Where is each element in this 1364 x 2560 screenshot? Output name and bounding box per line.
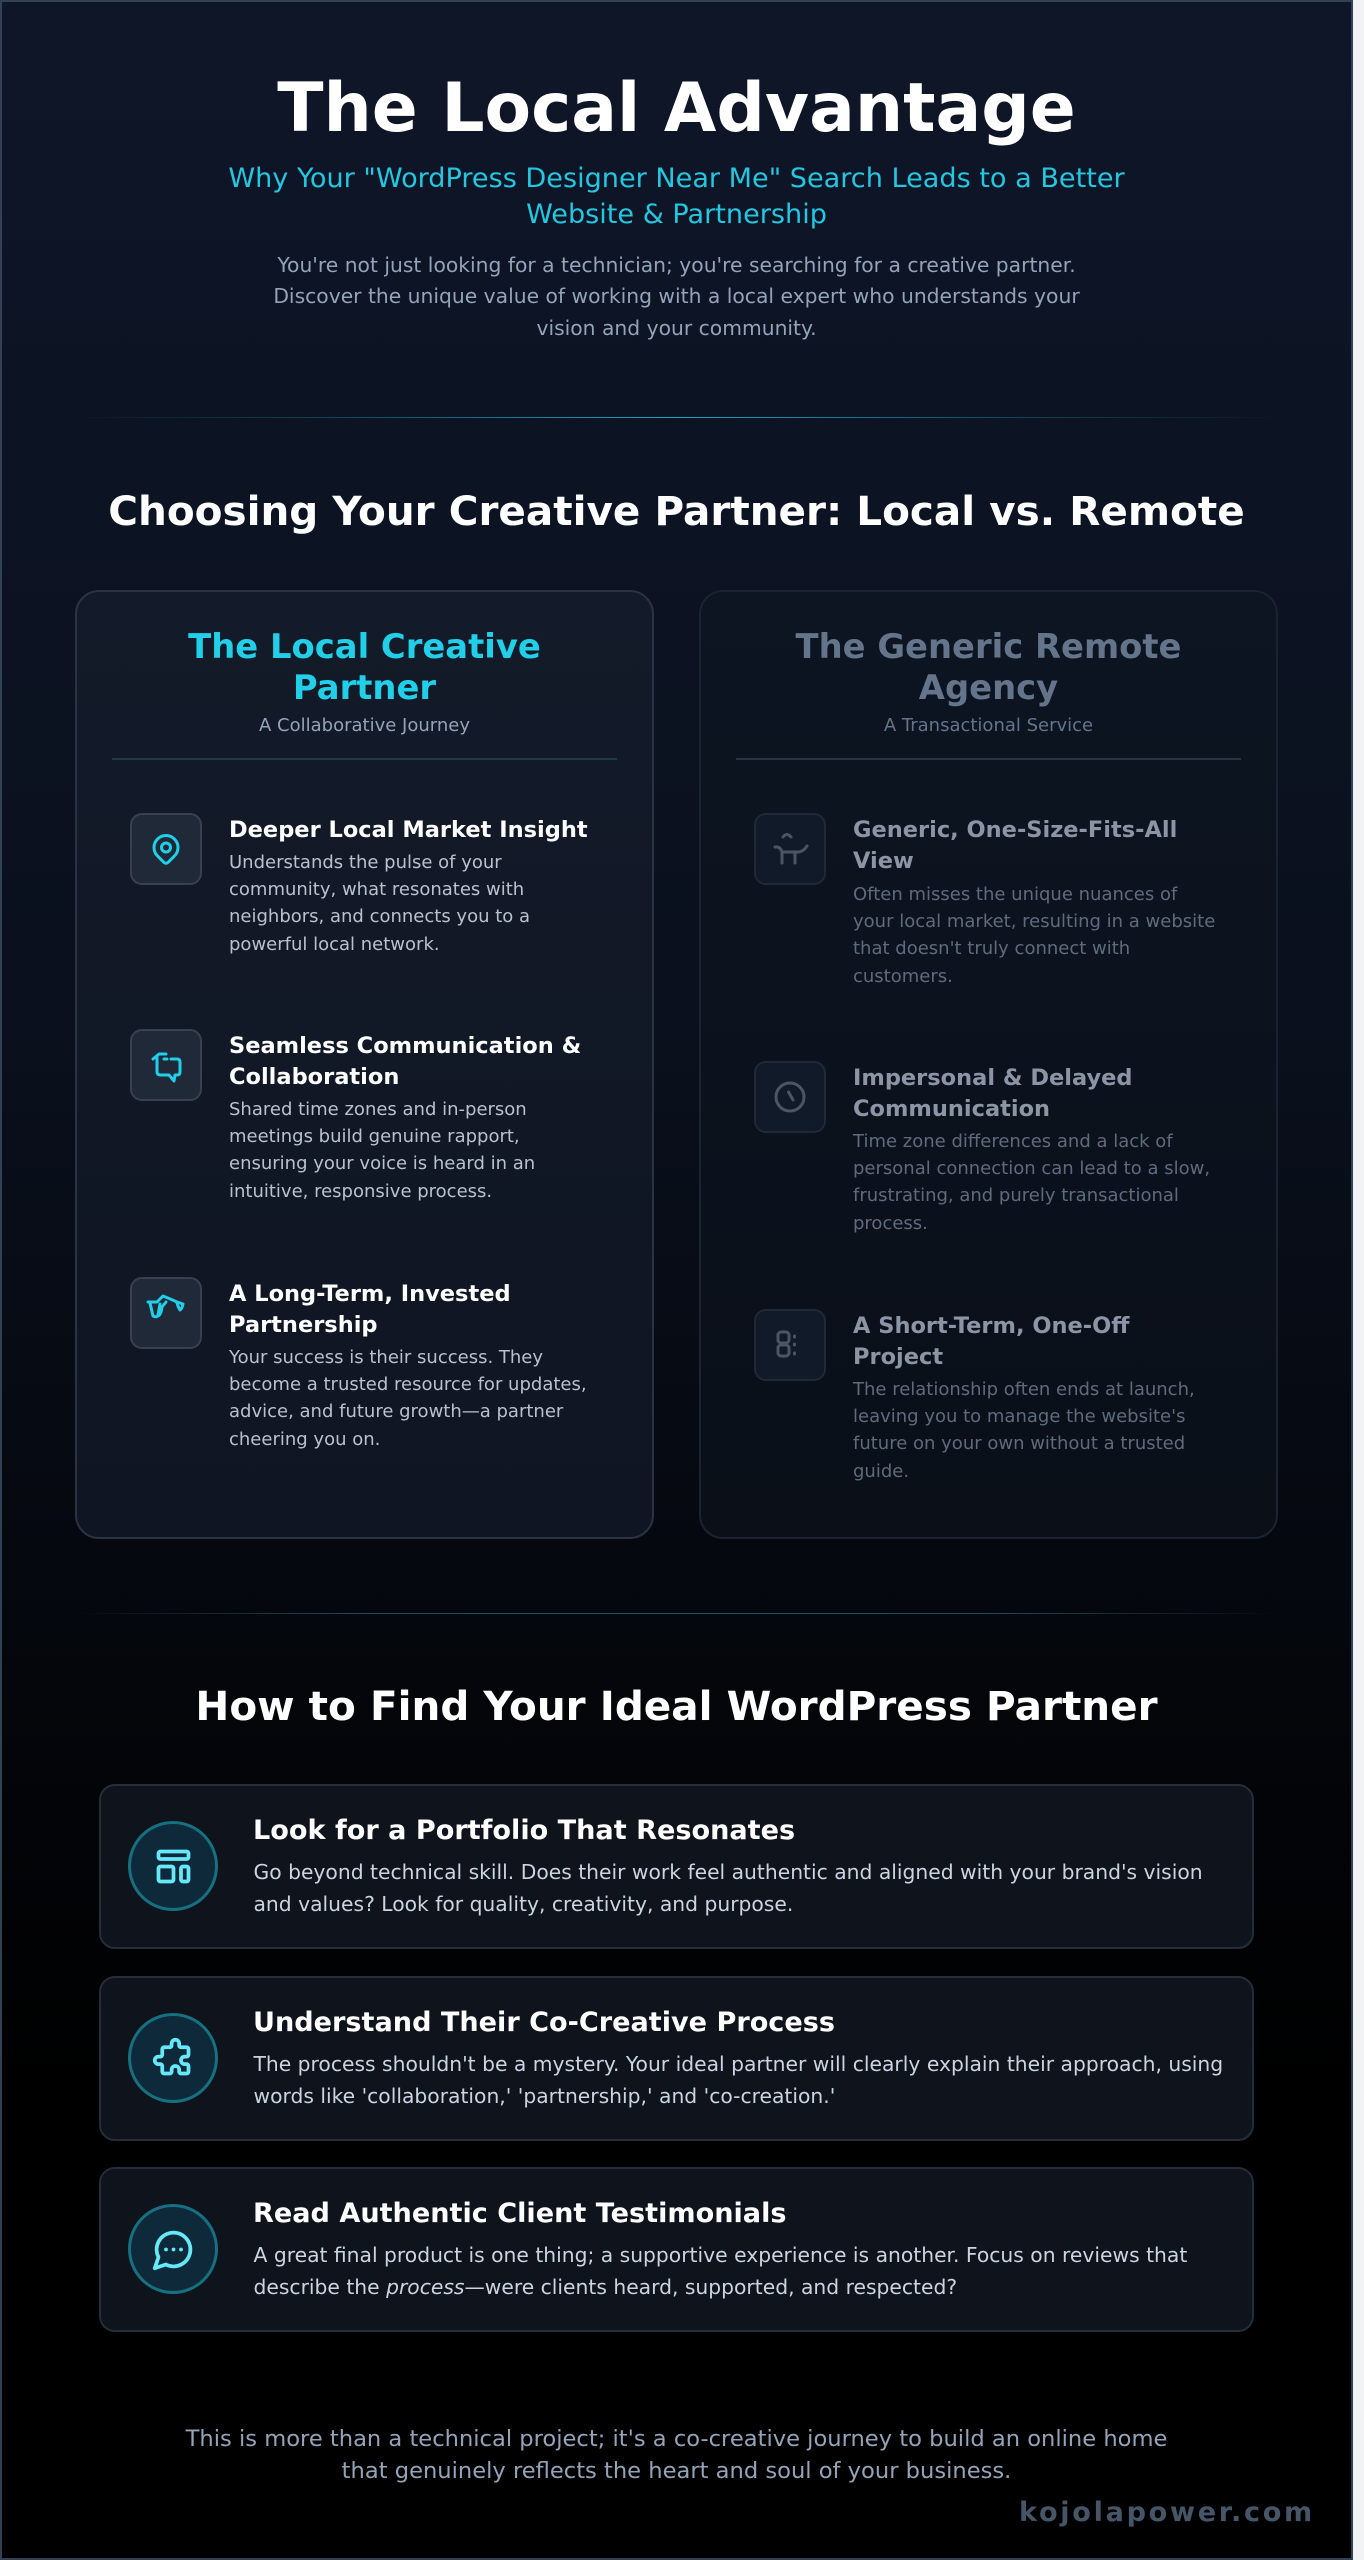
icon: clock (754, 1061, 826, 1133)
remote panel title (796, 626, 1181, 706)
item: generic view title (853, 817, 1177, 874)
title: The Local Advantage (277, 68, 1076, 147)
item: partnership text: advice, and future growth—a partner (229, 1401, 563, 1422)
local panel title: Partner (293, 668, 436, 706)
item: partnership text: Your success is their success. They (229, 1347, 543, 1368)
item: local insight title: Deeper Local Market Insight (229, 817, 588, 843)
item: delayed communication text: frustrating, and purely transactional (853, 1185, 1179, 1206)
item: communication title: Collaboration (229, 1064, 399, 1090)
portfolio text: and values? Look for quality, creativity, and purpose. (254, 1892, 793, 1916)
panel: process step (99, 1976, 1254, 2141)
item: one-off project text: guide. (853, 1461, 909, 1482)
icon: chat circle (128, 2204, 218, 2294)
item: one-off project text: The relationship often ends at launch, (853, 1379, 1195, 1400)
portfolio text: Go beyond technical skill. Does their work feel authentic and aligned with your brand's vision (254, 1860, 1203, 1884)
process text (253, 2052, 1223, 2108)
subtitle (228, 163, 1125, 230)
item: local insight text: Understands the pulse of your (229, 852, 502, 873)
item: delayed communication text: Time zone differences and a lack of (853, 1131, 1173, 1152)
icon: chat bubble (130, 1029, 202, 1101)
item: partnership text: become a trusted resource for updates, (229, 1374, 587, 1395)
item: one-off project text: leaving you to manage the website's (853, 1406, 1185, 1427)
remote panel rule (736, 758, 1241, 760)
item: communication text: meetings build genuine rapport, (229, 1126, 520, 1147)
intro text: Discover the unique value of working with a local expert who understands your (273, 284, 1080, 308)
closing statement: that genuinely reflects the heart and soul of your business. (342, 2458, 1011, 2484)
closing statement: This is more than a technical project; it's a co-creative journey to build an online home (186, 2426, 1167, 2452)
item: partnership text (229, 1347, 587, 1450)
local panel subtitle: A Collaborative Journey (259, 715, 470, 736)
item: communication text: intuitive, responsive process. (229, 1181, 492, 1202)
process text: words like 'collaboration,' 'partnership,' and 'co-creation.' (254, 2084, 835, 2108)
item: communication text: ensuring your voice is heard in an (229, 1153, 535, 1174)
remote panel title: Agency (919, 668, 1058, 706)
icon: puzzle piece (128, 2013, 218, 2103)
item: communication title: Seamless Communication & (229, 1033, 581, 1059)
subtitle: Website & Partnership (526, 199, 827, 230)
item: one-off project text (852, 1379, 1195, 1482)
item: communication text: Shared time zones and in-person (229, 1099, 527, 1120)
item: delayed communication title: Communication (853, 1096, 1050, 1122)
item: generic view text: that doesn't truly connect with (853, 938, 1130, 959)
item: delayed communication text (852, 1131, 1210, 1234)
item: local insight text: community, what resonates with (229, 879, 524, 900)
item: generic view text: Often misses the unique nuances of (853, 884, 1177, 905)
item: one-off project title: Project (853, 1344, 943, 1370)
testimonials text: describe the process—were clients heard, supported, and respected? (254, 2275, 957, 2299)
intro text (273, 252, 1080, 340)
item: delayed communication text: process. (853, 1213, 928, 1234)
panel: testimonials step (99, 2167, 1254, 2332)
local panel rule (112, 758, 617, 760)
local panel title (188, 626, 541, 706)
divider (70, 417, 1282, 418)
intro text: You're not just looking for a technician; you're searching for a creative partner. (277, 252, 1076, 276)
item: communication title (229, 1033, 581, 1090)
testimonials text (254, 2243, 1187, 2299)
item: delayed communication title (853, 1065, 1133, 1122)
icon: one-off project (754, 1309, 826, 1381)
icon: layout template (128, 1821, 218, 1911)
item: generic view text: customers. (853, 966, 953, 987)
item: partnership title: A Long-Term, Invested (229, 1281, 511, 1307)
heading: how to find: How to Find Your Ideal WordPress Partner (195, 1682, 1158, 1730)
item: generic view text (853, 884, 1215, 987)
item: partnership title (229, 1281, 511, 1338)
panel: generic remote agency (699, 590, 1278, 1539)
testimonials text: A great final product is one thing; a supportive experience is another. Focus on reviews that (254, 2243, 1187, 2267)
local panel title: The Local Creative (188, 626, 541, 666)
item: partnership title: Partnership (229, 1312, 378, 1338)
icon: generic view (754, 813, 826, 885)
icon: map pin (130, 813, 202, 885)
item: generic view title: Generic, One-Size-Fits-All (853, 817, 1177, 843)
remote panel subtitle: A Transactional Service (884, 715, 1093, 736)
panel: portfolio step (99, 1784, 1254, 1949)
remote panel title: The Generic Remote (796, 626, 1181, 666)
item: generic view text: your local market, resulting in a website (853, 911, 1215, 932)
portfolio text (254, 1860, 1203, 1916)
item: one-off project text: future on your own without a trusted (853, 1433, 1185, 1454)
item: generic view title: View (853, 848, 914, 874)
panel: local creative partner (75, 590, 654, 1539)
item: delayed communication title: Impersonal & Delayed (853, 1065, 1133, 1091)
portfolio title: Look for a Portfolio That Resonates (253, 1815, 795, 1846)
watermark: kojolapower.com (1019, 2497, 1315, 2528)
icon: handshake (130, 1277, 202, 1349)
divider (70, 1613, 1282, 1614)
process title: Understand Their Co-Creative Process (253, 2007, 835, 2038)
item: one-off project title: A Short-Term, One-Off (853, 1313, 1129, 1339)
heading: comparison: Choosing Your Creative Partner: Local vs. Remote (108, 487, 1245, 535)
subtitle: Why Your "WordPress Designer Near Me" Search Leads to a Better (228, 163, 1125, 194)
item: one-off project title (853, 1313, 1130, 1370)
process text: The process shouldn't be a mystery. Your ideal partner will clearly explain their approach, using (254, 2052, 1223, 2076)
item: local insight text (229, 852, 530, 955)
intro text: vision and your community. (536, 316, 817, 340)
item: local insight text: neighbors, and connects you to a (229, 906, 530, 927)
item: local insight text: powerful local network. (229, 934, 440, 955)
item: partnership text: cheering you on. (229, 1429, 380, 1450)
testimonials title: Read Authentic Client Testimonials (253, 2198, 786, 2229)
closing statement (186, 2426, 1167, 2484)
item: communication text (229, 1099, 535, 1202)
item: delayed communication text: personal connection can lead to a slow, (853, 1158, 1210, 1179)
